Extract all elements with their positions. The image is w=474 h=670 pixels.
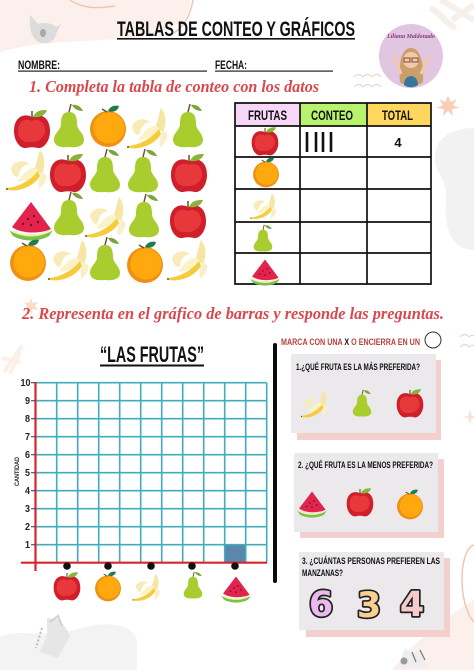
y axis numbers: 1 (25, 540, 30, 551)
date field: FECHA: (215, 58, 247, 72)
category fruit icons (54, 572, 251, 603)
chart title: “LAS FRUTAS” (100, 342, 204, 367)
chart title (100, 342, 204, 367)
title: TABLAS DE CONTEO Y GRÁFICOS (117, 18, 355, 41)
icon: zebra (398, 648, 428, 668)
panel: question 1: 1.¿QUÉ FRUTA ES LA MÁS PREFERIDA? (296, 362, 420, 372)
y axis numbers: 10 (20, 378, 31, 389)
heading: section 1: 1. Completa la tabla de conteo con los datos (29, 77, 319, 96)
y axis numbers: 5 (25, 468, 30, 479)
logo badge (379, 24, 443, 88)
fruit grid (6, 104, 207, 283)
y axis numbers: 3 (25, 504, 30, 515)
table fruit icons (250, 127, 280, 286)
y axis ticks (31, 383, 35, 545)
y axis numbers: 6 (25, 450, 30, 461)
logo badge: Liliana Maldonado (386, 34, 435, 40)
y axis numbers: 9 (25, 396, 30, 407)
bar (224, 545, 245, 563)
y axis numbers (20, 378, 31, 551)
bar chart (14, 378, 267, 603)
panel: question 3: 6 (309, 585, 333, 625)
tally table (235, 103, 431, 286)
panel: question 3: 4 (400, 585, 424, 625)
y axis numbers: 2 (25, 522, 30, 533)
panel: question 2 (294, 453, 444, 538)
instruction: MARCA CON UNA X O ENCIERRA EN UN (281, 337, 420, 348)
header: total (367, 103, 431, 126)
icon: giraffe (36, 616, 70, 658)
y axis label: CANTIDAD (14, 457, 21, 486)
date field (215, 58, 333, 72)
y axis numbers: 7 (25, 432, 30, 443)
header: frutas: FRUTAS (248, 107, 287, 123)
heading: section 2: 2. Representa en el gráfico de barras y responde las preguntas. (21, 304, 444, 323)
y axis numbers: 4 (25, 486, 30, 497)
panel: question 1 (291, 354, 441, 440)
panel: question 3: MANZANAS? (302, 568, 343, 578)
column divider (273, 343, 277, 583)
name field: NOMBRE: (18, 58, 60, 72)
y axis numbers: 8 (25, 414, 30, 425)
panel: question 3: 3 (357, 586, 381, 626)
icon: koala (30, 15, 61, 43)
tally marks (307, 132, 331, 152)
header: total: TOTAL (382, 107, 413, 123)
header: frutas (235, 103, 300, 126)
axes (21, 382, 267, 571)
total value: 4 (394, 135, 402, 150)
instruction (281, 332, 441, 348)
header: conteo: CONTEO (311, 107, 353, 123)
panel: question 3 (299, 552, 450, 637)
header: conteo (300, 103, 367, 126)
category markers (63, 562, 239, 570)
